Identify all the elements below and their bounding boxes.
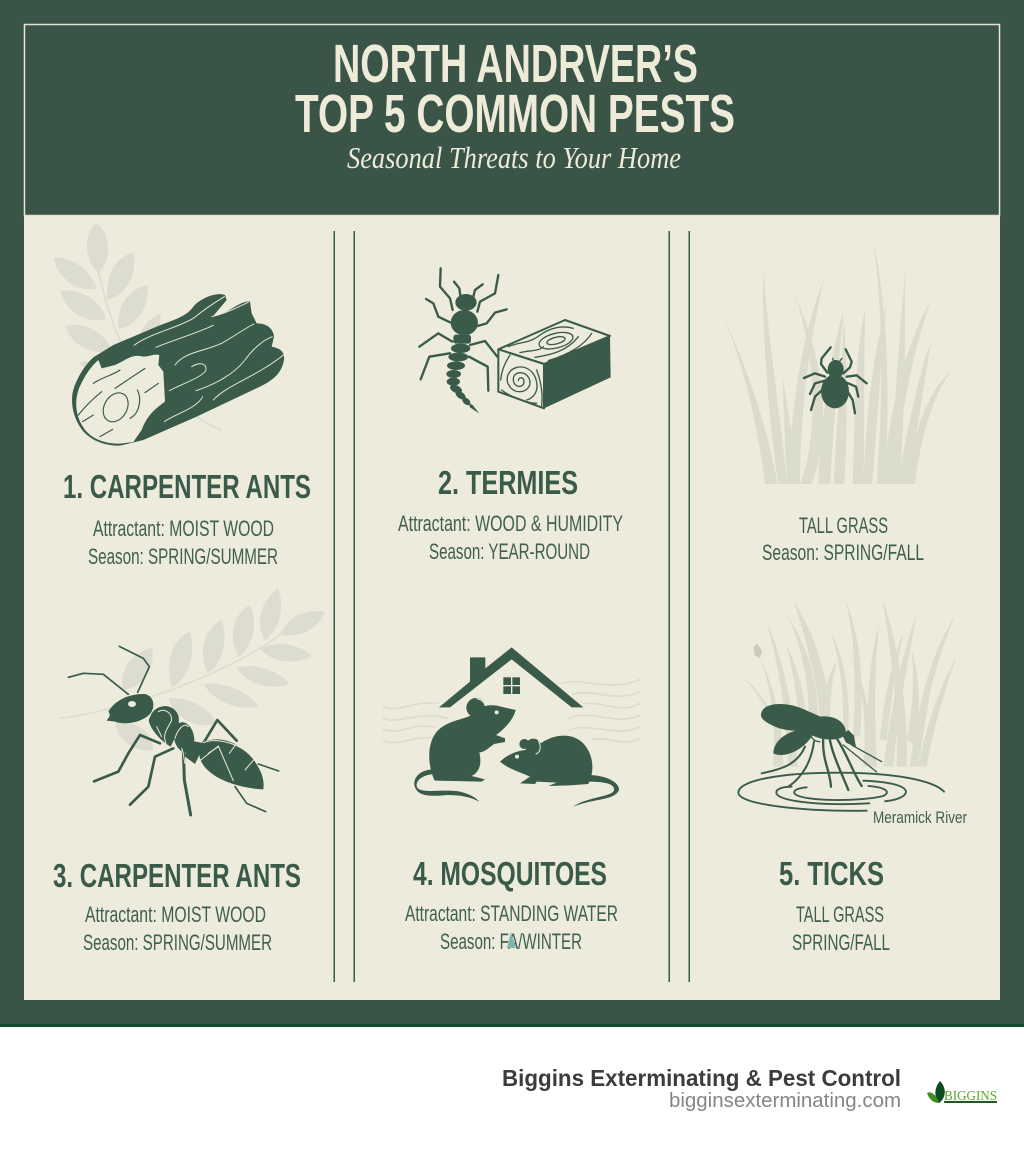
attractant and season: Season: YEAR-ROUND — [429, 539, 590, 564]
heading: 4. mosquitoes: 4. MOSQUITOES — [413, 856, 607, 893]
attractant text: TALL GRASS — [799, 513, 888, 538]
heading: 2. termies: 2. TERMIES — [438, 465, 578, 502]
title: NORTH ANDRVER’S — [333, 35, 698, 94]
content panel — [24, 216, 1000, 1000]
attractant and season — [398, 511, 623, 564]
card: tick in tall grass — [722, 242, 952, 565]
header banner — [24, 24, 1000, 216]
card 1: carpenter ants — [53, 223, 311, 569]
attractant and season: Attractant: WOOD & HUMIDITY — [398, 511, 623, 536]
card 2: termites — [398, 268, 623, 564]
attractant and season — [792, 902, 890, 955]
icon: tick and grass — [722, 242, 952, 484]
logo: BIGGINS — [944, 1089, 997, 1104]
title — [295, 35, 735, 144]
label: meramick river: Meramick River — [873, 808, 967, 827]
attractant and season: Attractant: MOIST WOOD — [93, 516, 274, 541]
attractant and season: Attractant: MOIST WOOD — [85, 902, 266, 927]
title: TOP 5 COMMON PESTS — [295, 85, 735, 144]
subtitle: Seasonal Threats to Your Home — [347, 140, 681, 175]
heading: 1. carpenter ants: 1. CARPENTER ANTS — [63, 469, 311, 506]
icon: rodents under a house roof — [383, 647, 640, 807]
icon: ant and leaf sprig — [60, 588, 325, 815]
attractant and season: Season: SPRING/SUMMER — [83, 930, 272, 955]
website: bigginsexterminating.com — [669, 1090, 901, 1112]
season text: Season: SPRING/FALL — [762, 540, 924, 565]
attractant and season — [88, 516, 278, 569]
card 4: mosquitoes — [383, 647, 640, 954]
attractant and season: TALL GRASS — [796, 902, 884, 927]
glitch mark over season text — [507, 932, 516, 948]
attractant and season — [405, 901, 618, 954]
company name: Biggins Exterminating & Pest Control — [502, 1065, 901, 1091]
icon: termite and wood block — [419, 268, 611, 414]
heading: 3. carpenter ants: 3. CARPENTER ANTS — [53, 858, 301, 895]
icon: mosquito over pond ripples — [738, 599, 957, 811]
logo — [927, 1081, 997, 1104]
attractant and season: SPRING/FALL — [792, 930, 890, 955]
attractant and season — [83, 902, 272, 955]
card 5: ticks — [738, 599, 967, 955]
footer — [502, 1065, 997, 1112]
heading: 5. ticks: 5. TICKS — [779, 856, 884, 893]
attractant and season: Attractant: STANDING WATER — [405, 901, 618, 926]
attractant and season: Season: SPRING/SUMMER — [88, 544, 278, 569]
attractant and season: Season: FA/WINTER — [440, 929, 582, 954]
icon: leaf sprig and damaged log — [53, 223, 284, 446]
card 3: carpenter ants — [53, 588, 325, 955]
